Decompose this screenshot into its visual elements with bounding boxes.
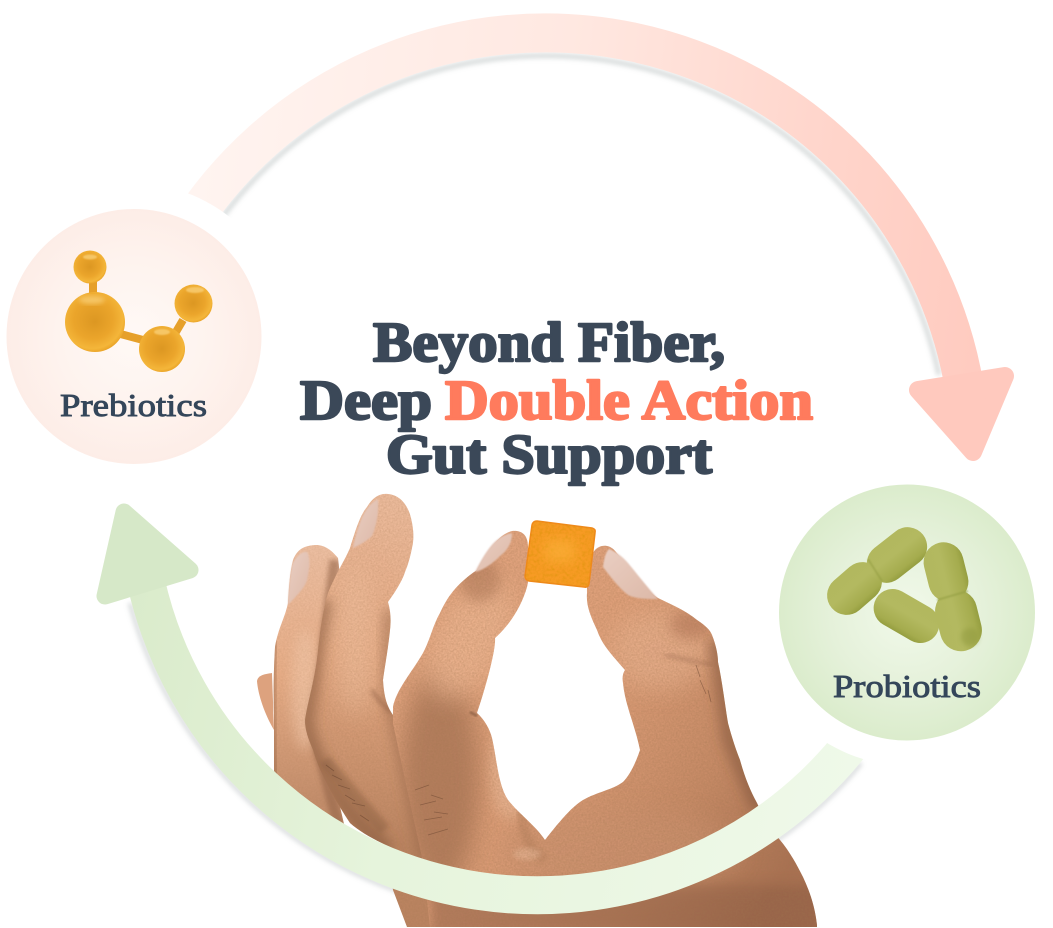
title [300,312,813,486]
label: prebiotics: Prebiotics [60,387,207,423]
index fingernail [475,533,512,572]
middle fingernail [353,499,378,548]
probiotics background circle [779,484,1035,740]
arrow: prebiotics to probiotics [184,33,1005,452]
icon: probiotic capsules [819,519,986,656]
index finger, palm and thumb [385,525,825,928]
prebiotics background circle [6,209,262,464]
title line 3: Gut Support [386,424,712,486]
title line 1: Beyond Fiber, [373,312,725,374]
shadow under green arrow [130,603,861,914]
middle finger [305,494,430,927]
title line 2: double action highlight: Double Action [445,370,813,432]
white ring around probiotics circle [754,460,1053,766]
arrow: probiotics to prebiotics [105,512,885,895]
orange gummy [524,520,596,588]
ring fingernail [288,552,309,605]
ring finger [274,545,344,824]
icon: prebiotic molecule [65,250,212,372]
panel: prebiotics [6,209,262,464]
label: probiotics: Probiotics [833,668,981,704]
title line 2: deep: Deep [300,370,432,432]
panel: probiotics [779,484,1035,740]
pinky finger [257,673,274,730]
shadow under red arrow [223,56,939,375]
hand holding gummy [257,490,825,928]
thumbnail [603,549,658,599]
white ring around prebiotics circle [0,184,287,490]
